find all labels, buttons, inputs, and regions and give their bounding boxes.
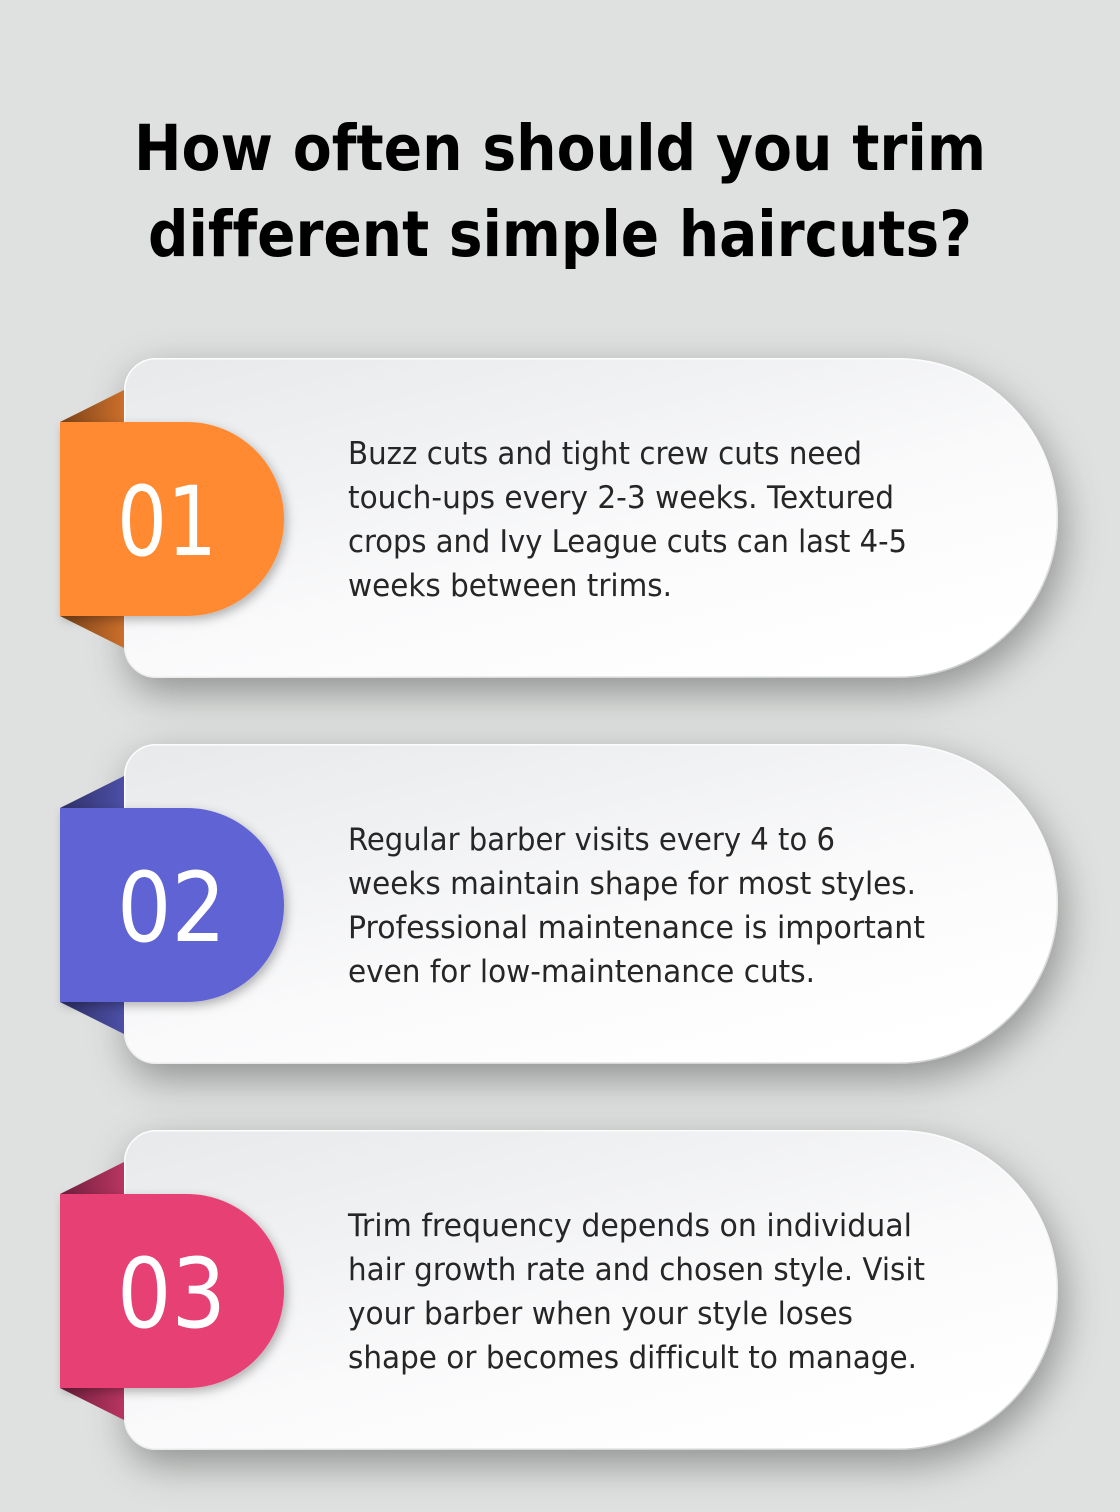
panel: step 02 bbox=[60, 745, 1057, 1063]
text 01: weeks between trims. bbox=[348, 568, 672, 604]
text 03: shape or becomes difficult to manage. bbox=[348, 1340, 917, 1376]
fold bottom 01 bbox=[60, 616, 124, 648]
title: How often should you trim bbox=[134, 111, 986, 185]
text 02 bbox=[348, 822, 925, 990]
fold top 02 bbox=[60, 776, 124, 808]
text 01: crops and Ivy League cuts can last 4-5 bbox=[348, 524, 907, 560]
fold top 01 bbox=[60, 390, 124, 422]
title: different simple haircuts? bbox=[148, 197, 972, 271]
badge 01 bbox=[60, 422, 284, 616]
text 03 bbox=[347, 1208, 925, 1376]
text 01: Buzz cuts and tight crew cuts need bbox=[348, 436, 862, 472]
number 03: 03 bbox=[117, 1238, 226, 1350]
card 01 bbox=[125, 359, 1057, 677]
fold top 03 bbox=[60, 1162, 124, 1194]
card 02 bbox=[125, 745, 1057, 1063]
text 03: hair growth rate and chosen style. Visit bbox=[348, 1252, 925, 1288]
text 03: your barber when your style loses bbox=[348, 1296, 853, 1332]
text 02: even for low-maintenance cuts. bbox=[348, 954, 815, 990]
text 02: Regular barber visits every 4 to 6 bbox=[348, 822, 835, 858]
text 01: touch-ups every 2-3 weeks. Textured bbox=[348, 480, 894, 516]
number 01: 01 bbox=[117, 466, 217, 578]
text 01 bbox=[348, 436, 907, 604]
text 02: weeks maintain shape for most styles. bbox=[348, 866, 916, 902]
title bbox=[134, 111, 986, 271]
fold bottom 03 bbox=[60, 1388, 124, 1420]
text 02: Professional maintenance is important bbox=[348, 910, 925, 946]
badge 02 bbox=[60, 808, 284, 1002]
card 03 bbox=[125, 1131, 1057, 1449]
panel: step 03 bbox=[60, 1131, 1057, 1449]
text 03: Trim frequency depends on individual bbox=[347, 1208, 912, 1244]
fold bottom 02 bbox=[60, 1002, 124, 1034]
panel: step 01 bbox=[60, 359, 1057, 677]
badge 03 bbox=[60, 1194, 284, 1388]
number 02: 02 bbox=[117, 852, 226, 964]
